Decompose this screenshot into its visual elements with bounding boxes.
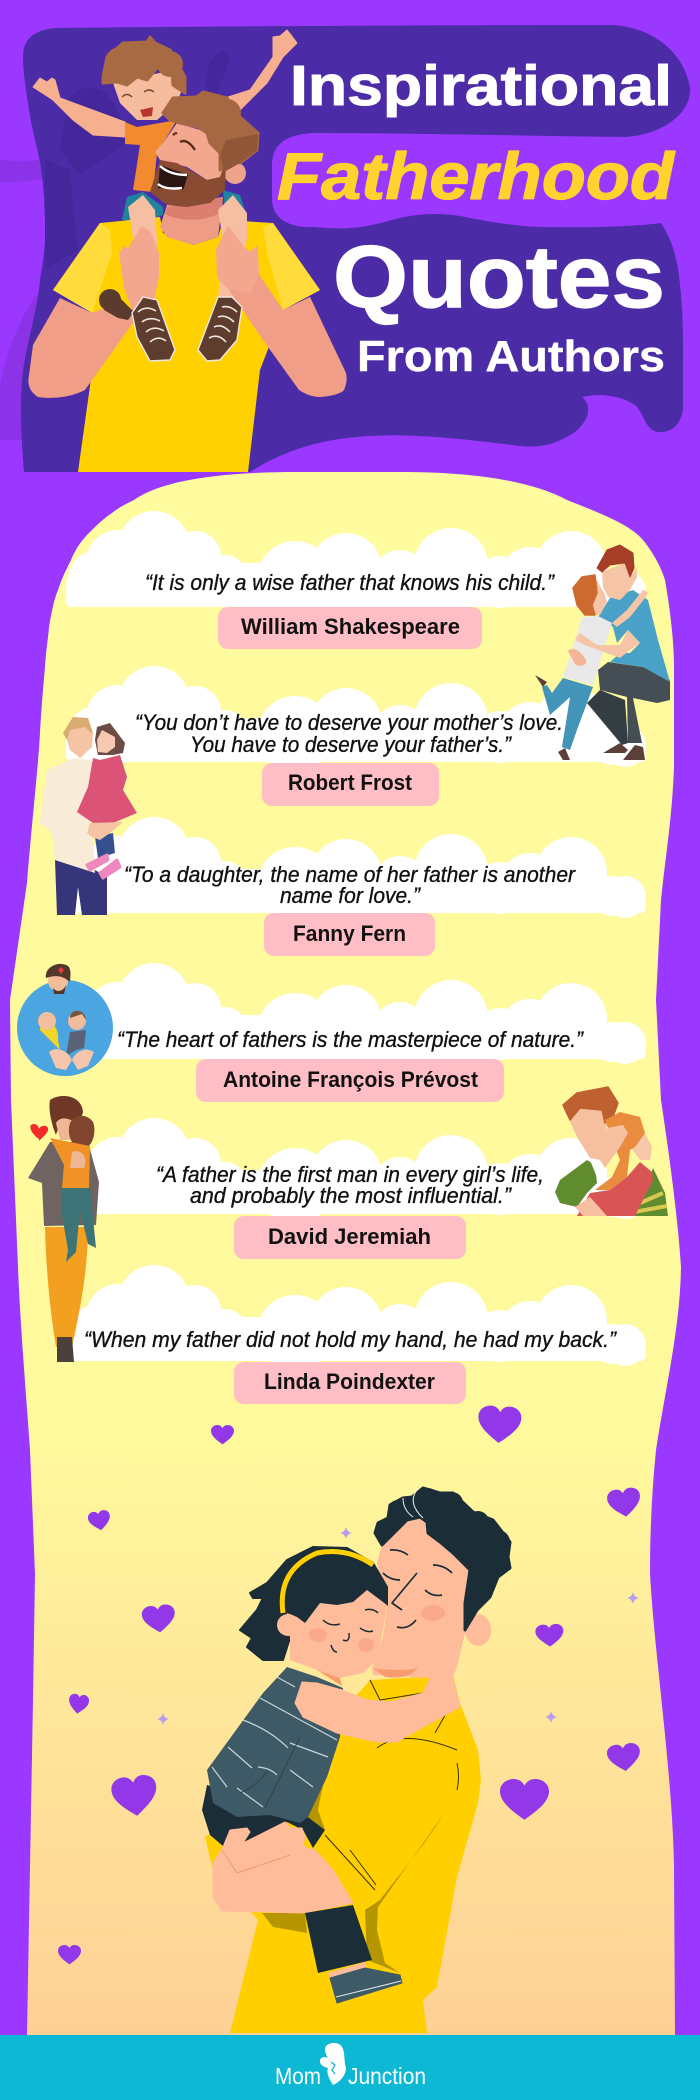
man's face [568, 1108, 607, 1160]
heart [67, 1693, 90, 1715]
icon: father arm [213, 1822, 353, 1913]
boy's arm [612, 590, 648, 627]
icon: logo mark [320, 2043, 346, 2085]
heart [110, 1774, 160, 1818]
author pill: Robert Frost [262, 763, 439, 806]
icon: vest stripes [212, 1677, 337, 1807]
icon: daughter features [323, 1609, 378, 1652]
header shadow figure on blob [45, 50, 230, 270]
icon: daughter shorts [202, 1785, 325, 1848]
author pill: David Jeremiah: David Jeremiah [268, 1224, 431, 1249]
icon: headband [282, 1552, 373, 1613]
logo: MomJunction [275, 2043, 426, 2089]
sparkles [157, 1527, 639, 1725]
icon: daughter blush [309, 1628, 374, 1652]
header illustration: father with son on shoulders [28, 30, 347, 472]
icon: daughter face [287, 1590, 387, 1678]
author pill: Fanny Fern [264, 913, 435, 956]
icon: daughter leg [305, 1905, 372, 1973]
quote 5 [156, 1162, 544, 1208]
father's hair [63, 717, 93, 740]
quote 2 [135, 710, 563, 757]
quote 2: “You don’t have to deserve your mother’s love. [135, 710, 563, 735]
icon: father blush [421, 1605, 445, 1621]
cloud 5 [66, 1118, 646, 1224]
icon: daughter arm [295, 1675, 460, 1742]
illustration: father carrying daughter [202, 1488, 510, 2033]
icon: father hair [163, 92, 258, 170]
quote 3 [124, 862, 577, 908]
icon: father left hand [120, 227, 158, 310]
illustration: father holding daughter (left) [40, 717, 137, 915]
title line: Fatherhood: Fatherhood [277, 139, 676, 213]
icon: boy right arm [228, 30, 297, 110]
icon: shirt shadows [262, 1760, 443, 1973]
icon: father neck [160, 197, 223, 245]
boy's shoes [535, 675, 570, 760]
icon: daughter vest [207, 1667, 343, 1823]
girl's hair [595, 1112, 645, 1190]
man's hand [600, 1125, 628, 1168]
quote 6: “When my father did not hold my hand, he had my back.” [84, 1327, 618, 1352]
header dark blob [21, 25, 690, 472]
background shadow figure on purple [0, 160, 66, 440]
man's trousers [598, 662, 670, 743]
icon: watch [99, 289, 134, 320]
heart [535, 1624, 564, 1647]
man's shoes [603, 743, 645, 760]
heart large [477, 1405, 522, 1444]
boy's hair [573, 575, 597, 615]
author pill: Antoine François Prévost [196, 1059, 504, 1102]
icon: father hair [375, 1488, 510, 1630]
daughter's legs [95, 833, 115, 858]
icon: daughter ear [277, 1614, 299, 1636]
man's hair [597, 545, 634, 577]
illustration: family in blue circle [17, 964, 113, 1076]
icon: shirt sleeves [53, 223, 320, 313]
icon: boy face [113, 70, 183, 120]
father's arm [87, 822, 123, 840]
father's trousers [55, 860, 107, 915]
cloud 2 [66, 666, 646, 772]
man's hair [563, 1087, 618, 1123]
author pill: William Shakespeare [218, 607, 482, 649]
icon: father left arm [28, 298, 135, 398]
heart [606, 1486, 643, 1519]
quote 5: “A father is the first man in every girl’s life, [156, 1162, 544, 1187]
author pill: Robert Frost: Robert Frost [288, 770, 413, 795]
boy's trousers [542, 678, 593, 750]
title line: Inspirational: Inspirational [290, 54, 672, 118]
icon: father face [372, 1517, 470, 1678]
man's jacket left [555, 1160, 597, 1207]
illustration: father hugging daughter (right) [555, 1087, 668, 1220]
author pill: William Shakespeare: William Shakespeare [241, 614, 460, 639]
cloud 1 [66, 511, 646, 617]
quote 3: name for love.” [280, 883, 422, 908]
man's jacket right [632, 1168, 668, 1216]
heart [141, 1604, 177, 1634]
boy's shirt [563, 616, 612, 685]
father's shirt [40, 758, 97, 873]
heart [500, 1779, 549, 1820]
icon: father ear [224, 162, 246, 184]
title line: Quotes: Quotes [333, 227, 665, 326]
man's back leg [587, 690, 628, 745]
icon: boy right thigh [218, 195, 247, 300]
cloud 6 [66, 1265, 646, 1371]
icon: boy shorts [122, 190, 247, 222]
cloud 4 [66, 963, 646, 1069]
heart small [211, 1425, 234, 1444]
icon: father beard [150, 160, 226, 207]
author pill: Linda Poindexter: Linda Poindexter [264, 1369, 435, 1394]
icon: father shirt [205, 1675, 481, 2033]
daughter's face [97, 730, 115, 753]
logo: MomJunction: Junction [348, 2063, 426, 2089]
panel: yellow quotes panel [10, 472, 681, 2035]
icon: father ear [465, 1614, 491, 1646]
man's face [602, 563, 637, 600]
daughter's shoes [87, 855, 120, 878]
man's arm [575, 630, 640, 658]
icon: boy left shoe [132, 297, 175, 361]
icon: daughter shoe [330, 1968, 402, 2003]
cloud 3 [66, 817, 646, 923]
icon: father shirt [53, 217, 320, 472]
man's shirt [598, 590, 670, 682]
icon: father mouth [158, 165, 188, 190]
icon: daughter ankle [328, 1962, 367, 1978]
icon: boy shirt [125, 120, 177, 192]
girl's face [630, 1133, 652, 1160]
heart [606, 1742, 642, 1773]
daughter's hair [95, 723, 125, 755]
daughter's dress [77, 755, 137, 823]
heart [58, 1945, 81, 1964]
quote 1: “It is only a wise father that knows his child.” [145, 570, 556, 595]
icon: father neck shadow [373, 1668, 418, 1678]
author pill: Fanny Fern: Fanny Fern [293, 921, 406, 946]
icon: father right arm [227, 273, 347, 397]
wordmark: Mom [275, 2063, 321, 2089]
icon: boy hair [103, 37, 185, 93]
quote 5: and probably the most influential.” [190, 1183, 513, 1208]
man's collar [590, 1162, 596, 1176]
girl's hand [575, 1197, 607, 1216]
quote 2: You have to deserve your father’s.” [190, 732, 513, 757]
illustration: father hugging son (right) [535, 545, 670, 760]
boy's face [592, 577, 607, 615]
icon: shoelaces [138, 307, 237, 342]
quote 4: “The heart of fathers is the masterpiece of nature.” [117, 1027, 585, 1052]
footer band [0, 2035, 700, 2100]
girl's top [577, 1162, 653, 1220]
icon: boy right shoe [198, 297, 242, 361]
icon: father features [383, 1550, 452, 1628]
title [277, 54, 676, 381]
heart [87, 1509, 112, 1532]
title line: From Authors: From Authors [357, 332, 665, 381]
icon: father right hand [217, 227, 258, 293]
author pill: Linda Poindexter [234, 1362, 466, 1404]
illustration: father hugging child (left) with heart [28, 1096, 99, 1362]
father's head [65, 718, 93, 758]
quote 3: “To a daughter, the name of her father is another [124, 862, 577, 887]
icon: boy left arm [33, 78, 125, 137]
icon: daughter neck shadow [317, 1670, 342, 1686]
author pill: Antoine François Prévost: Antoine François Prévost [223, 1067, 479, 1092]
icon: boy left thigh [128, 195, 157, 300]
icon: daughter hair [240, 1547, 387, 1660]
icon: father face [155, 123, 223, 180]
author pill: David Jeremiah [234, 1216, 466, 1259]
icon: shirt lines [325, 1680, 458, 1890]
hearts [58, 1405, 643, 1964]
